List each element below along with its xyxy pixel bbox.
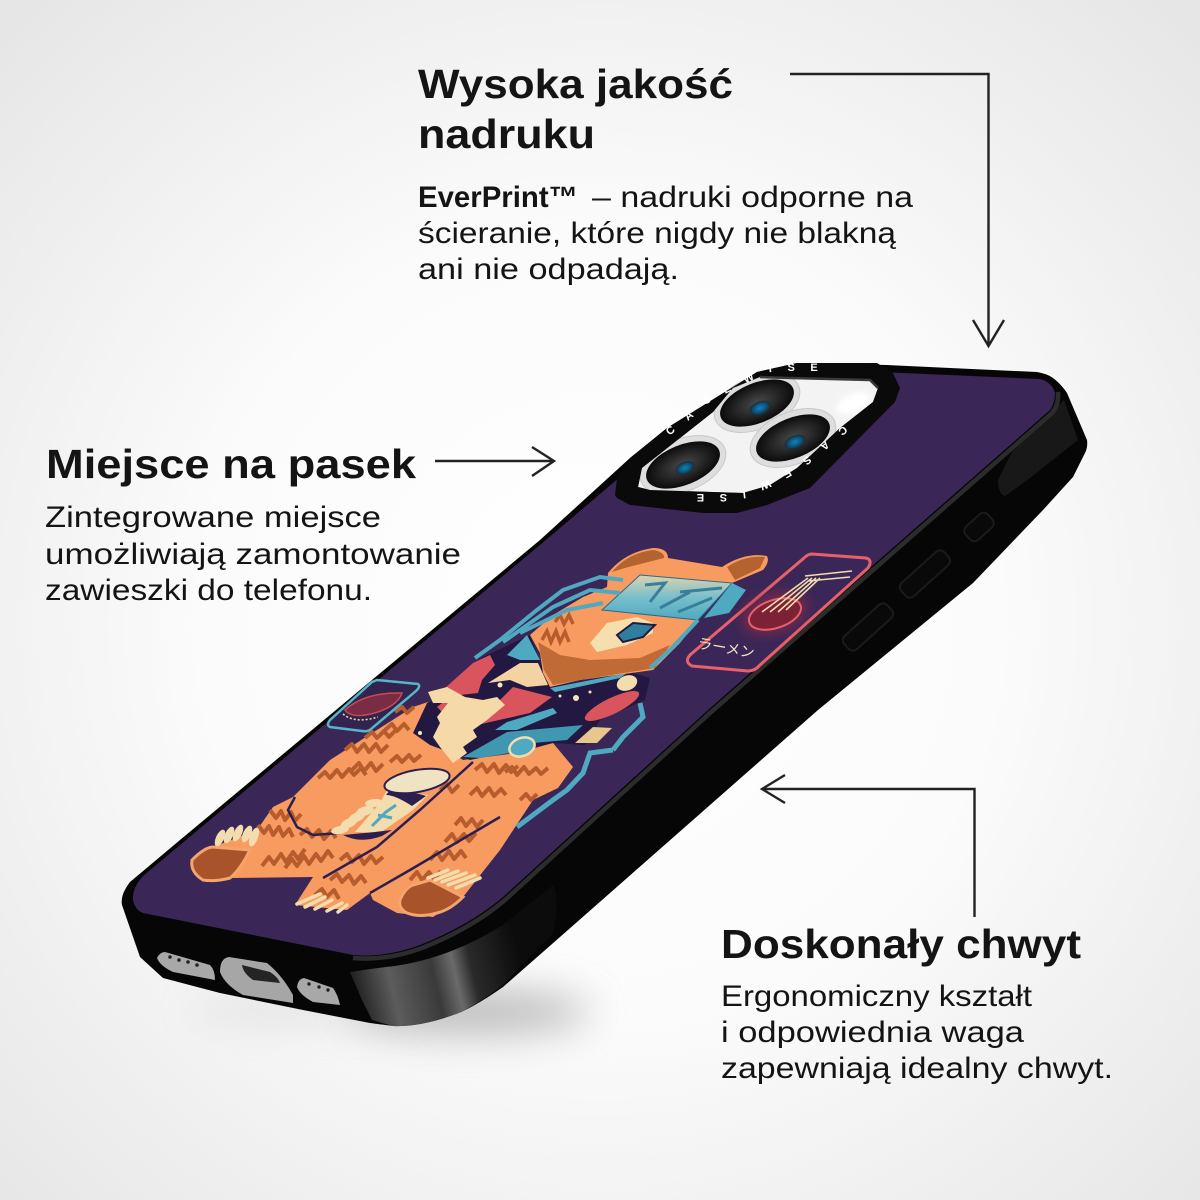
ramen neon sign [687, 554, 870, 671]
belly outline [288, 797, 340, 835]
red patch [582, 686, 642, 726]
phone case [122, 363, 1087, 1026]
body line 2: ścieranie, które nigdy nie blakną [418, 217, 897, 250]
right foot claws [428, 870, 480, 888]
leg outlines [323, 762, 500, 893]
rice [343, 714, 378, 720]
heading: Miejsce na pasek [46, 441, 416, 487]
body line 2: i odpowiednia waga [721, 1016, 1025, 1049]
bear body [192, 702, 573, 917]
arrow: strap slot [435, 447, 554, 476]
heading line 2: nadruku [418, 111, 595, 157]
arrow: grip [762, 775, 974, 917]
heading: Doskonały chwyt [721, 921, 1081, 967]
bear head [530, 548, 768, 687]
noodles and chopsticks [762, 571, 852, 612]
japanese label: ラーメン [696, 632, 756, 663]
sign frame [328, 680, 419, 731]
body line 1 bold: EverPrint™ [418, 181, 578, 214]
camera island [615, 363, 900, 513]
left foot pad [192, 847, 250, 881]
right lens [742, 397, 844, 479]
teal cable lower [517, 703, 643, 827]
snout [590, 617, 653, 652]
camera opening [638, 377, 878, 493]
heading: Wysoka jakość [418, 61, 733, 107]
right foot pad [400, 880, 463, 916]
bear ears [612, 550, 765, 580]
red hair upper [445, 655, 495, 695]
top lens [706, 362, 808, 444]
circle badge [507, 734, 537, 760]
red hair lower [477, 687, 552, 725]
bowl glow [736, 583, 814, 643]
ramen bowl [745, 592, 805, 636]
annotation: print quality [418, 61, 914, 286]
body line 1: Zintegrowane miejsce [45, 501, 381, 534]
camera ring [615, 363, 900, 513]
stars [418, 682, 592, 735]
nose [617, 623, 655, 642]
head fur band [538, 642, 670, 685]
red hair left [437, 695, 452, 722]
bear fur texture [258, 707, 548, 899]
teal swirl top [507, 635, 540, 660]
bear illustration [192, 548, 768, 917]
teal sleeve upper [495, 708, 557, 730]
body line 1: Ergonomiczny kształt [721, 980, 1032, 1013]
sushi [345, 693, 402, 716]
teal sleeve [463, 725, 583, 758]
body line 2: umożliwiają zamontowanie [45, 538, 461, 571]
front paw claws [297, 894, 347, 912]
headphone cables [475, 577, 698, 668]
goggle side connector [704, 583, 746, 618]
teal collar strip [550, 673, 627, 692]
body line 1: – nadruki odporne na [592, 181, 914, 214]
side grip area [998, 400, 1078, 496]
charging port [220, 957, 293, 1003]
side button: volume down [840, 601, 896, 653]
brand text top: CASEWISE [666, 364, 818, 434]
head fur detail [542, 615, 573, 642]
flash shine [833, 387, 873, 419]
left foot claws [213, 823, 261, 848]
smiley badge [614, 672, 640, 694]
speaker left [157, 952, 215, 980]
brand text bottom: CASEWISE [697, 426, 847, 502]
cream upper hand [488, 663, 548, 687]
sign frame [687, 554, 870, 671]
VR goggles [602, 575, 732, 620]
ring inner bevel [760, 377, 878, 388]
body line 3: ani nie odpadają. [418, 253, 679, 286]
cup held in paw [330, 764, 451, 840]
purple back panel [133, 372, 1055, 956]
corner highlight [350, 885, 556, 1026]
side button: volume up [897, 548, 953, 600]
cream hands [428, 687, 505, 763]
speaker right [297, 978, 340, 1005]
arrow: print quality [790, 74, 1004, 346]
annotation: strap slot [45, 441, 461, 607]
chest dark space [413, 635, 650, 760]
phone shadow [190, 990, 590, 1034]
body line 3: zawieszki do telefonu. [45, 574, 372, 607]
goggle details [645, 583, 722, 612]
case silhouette [122, 363, 1087, 1026]
annotation: grip [721, 921, 1113, 1085]
panel edge highlight [353, 392, 1058, 959]
left lens [632, 424, 734, 506]
body line 3: zapewniają idealny chwyt. [721, 1052, 1113, 1085]
small labels [575, 727, 612, 743]
sushi neon sign [328, 680, 419, 731]
side button: action [962, 510, 996, 544]
